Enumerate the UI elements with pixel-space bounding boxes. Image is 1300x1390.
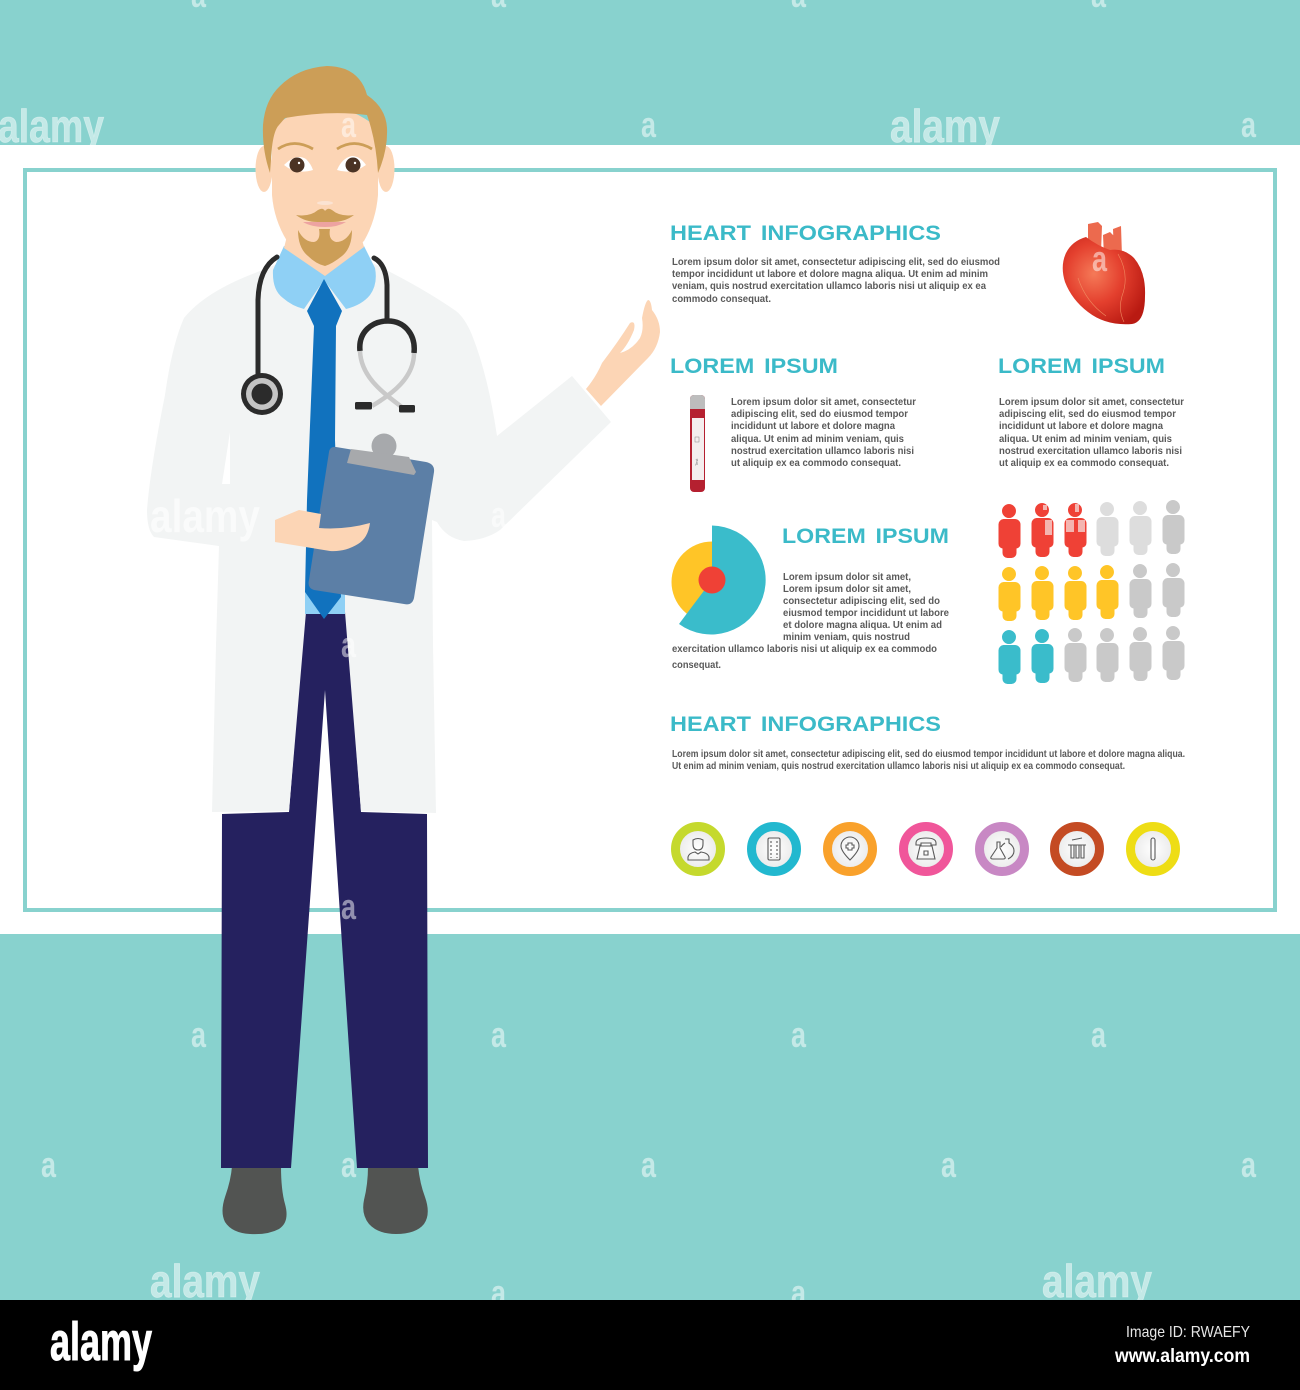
tie [305, 279, 342, 619]
watermarks on background: a [341, 1144, 357, 1185]
text block: ut aliquip ex ea commodo consequat. [999, 458, 1169, 469]
text block: Lorem ipsum dolor sit amet, consectetur [731, 397, 916, 408]
icon: blood test tube [690, 395, 705, 492]
row 3: teal [998, 626, 1184, 684]
intro paragraph: tempor incididunt ut labore et dolore magna aliqua. Ut enim ad minim [672, 269, 988, 280]
face [272, 106, 378, 272]
icon: pills [752, 826, 796, 872]
row 1: red [998, 500, 1184, 558]
icon: heart [1063, 222, 1145, 324]
heading: LOREM IPSUM [998, 355, 1165, 378]
icon: flasks [980, 826, 1024, 872]
heading: HEART INFOGRAPHICS [670, 222, 941, 245]
clipboard [309, 434, 434, 604]
text block: et dolore magna aliqua. Ut enim ad [783, 620, 942, 631]
icon: heart: a [1092, 238, 1108, 279]
image id: Image ID: RWAEFY [1126, 1324, 1250, 1341]
moustache [296, 209, 354, 222]
hair [263, 66, 387, 173]
icon row [676, 826, 1176, 872]
text block: incididunt ut labore et dolore magna [731, 421, 895, 432]
row 2: yellow [998, 563, 1184, 621]
intro paragraph: commodo consequat. [672, 294, 771, 305]
pictogram chart: people [998, 500, 1184, 684]
bottom section: heart infographics [670, 713, 1185, 772]
nose highlight [317, 201, 333, 205]
text block [999, 397, 1184, 469]
intro paragraph: veniam, quis nostrud exercitation ullamco laboris nisi ut aliquip ex ea [672, 281, 986, 292]
coat watermarks [150, 104, 507, 927]
text block: nostrud exercitation ullamco laboris nisi [731, 446, 914, 457]
stethoscope [241, 257, 415, 415]
eyes [284, 156, 366, 172]
heading: LOREM IPSUM [782, 525, 949, 548]
text block [672, 749, 1185, 772]
holding hand [275, 510, 370, 551]
text block: ut aliquip ex ea commodo consequat. [731, 458, 901, 469]
icon: thermometer [1130, 826, 1176, 872]
top section: heart infographics [670, 222, 1145, 324]
text block [731, 397, 916, 469]
coat watermarks: a [491, 494, 507, 535]
intro paragraph [672, 257, 1000, 305]
text block: exercitation ullamco laboris nisi ut aliquip ex ea commodo [672, 644, 937, 655]
shirt and collar [273, 246, 376, 614]
watermarks on background: a [641, 104, 657, 145]
coat watermarks: a [341, 624, 357, 665]
text block: Lorem ipsum dolor sit amet, [783, 572, 911, 583]
text block: Lorem ipsum dolor sit amet, consectetur [999, 397, 1184, 408]
doctor figure [147, 66, 660, 1234]
text block: consectetur adipiscing elit, sed do [783, 596, 940, 607]
text block: adipiscing elit, sed do eiusmod tempor [731, 409, 908, 420]
eyebrows [278, 144, 372, 149]
text block: incididunt ut labore et dolore magna [999, 421, 1163, 432]
watermarks on background: a [941, 1144, 957, 1185]
footer bar [0, 1300, 1300, 1390]
panel: pie chart section [672, 525, 949, 671]
mouth [303, 222, 346, 227]
icon: test tubes [1054, 826, 1100, 872]
neck [284, 236, 364, 276]
watermarks on background: a [1091, 1014, 1107, 1055]
website: www.alamy.com [1114, 1346, 1250, 1367]
trousers [221, 610, 428, 1168]
watermarks on background: a [1241, 104, 1257, 145]
watermarks on background: a [791, 1272, 807, 1313]
watermarks on background: a [491, 1014, 507, 1055]
pie chart [672, 526, 766, 634]
text block: adipiscing elit, sed do eiusmod tempor [999, 409, 1176, 420]
watermarks on background: alamy [1042, 1255, 1152, 1307]
text block: Ut enim ad minim veniam, quis nostrud exercitation ullamco laboris nisi ut aliquip ex ea commodo consequat. [672, 761, 1125, 772]
icon: doctor [676, 826, 720, 872]
watermarks on background: alamy [0, 100, 104, 152]
coat watermarks: a [341, 104, 357, 145]
shoes [222, 1166, 428, 1234]
heading: HEART INFOGRAPHICS [670, 713, 941, 736]
text block: Lorem ipsum dolor sit amet, consectetur adipiscing elit, sed do eiusmod tempor incididunt ut labore et dolore magna aliqua. [672, 749, 1185, 760]
watermarks on background: a [41, 1144, 57, 1185]
watermarks on background: alamy [150, 1255, 260, 1307]
coat watermarks: alamy [150, 490, 260, 542]
coat pocket slit [222, 432, 230, 484]
text block: nostrud exercitation ullamco laboris nisi [999, 446, 1182, 457]
icon: telephone [904, 826, 948, 872]
ears [256, 146, 394, 192]
text block [672, 572, 949, 671]
watermarks on background: alamy [890, 100, 1000, 152]
text block: Lorem ipsum dolor sit amet, [783, 584, 911, 595]
goatee [298, 229, 352, 266]
text block: aliqua. Ut enim ad minim veniam, quis [999, 434, 1172, 445]
text block: consequat. [672, 660, 721, 671]
footer logo: alamy [50, 1312, 152, 1372]
heading: LOREM IPSUM [670, 355, 838, 378]
text block: minim veniam, quis nostrud [783, 632, 910, 643]
white coat [147, 262, 611, 813]
coat watermarks: a [341, 886, 357, 927]
watermarks on background: a [491, 1272, 507, 1313]
icon: blood test tube: Test [694, 458, 699, 466]
watermarks on background: a [1241, 1144, 1257, 1185]
watermarks on background: a [191, 1014, 207, 1055]
intro paragraph: Lorem ipsum dolor sit amet, consectetur adipiscing elit, sed do eiusmod [672, 257, 1000, 268]
text block: aliqua. Ut enim ad minim veniam, quis [731, 434, 904, 445]
watermarks on background: a [641, 1144, 657, 1185]
text block: eiusmod tempor incididunt ut labore [783, 608, 949, 619]
panel: blood test [670, 355, 916, 492]
raised hand [586, 300, 660, 406]
watermarks on background: a [791, 1014, 807, 1055]
panel: right text [998, 355, 1184, 469]
icon: map pin [828, 826, 872, 872]
